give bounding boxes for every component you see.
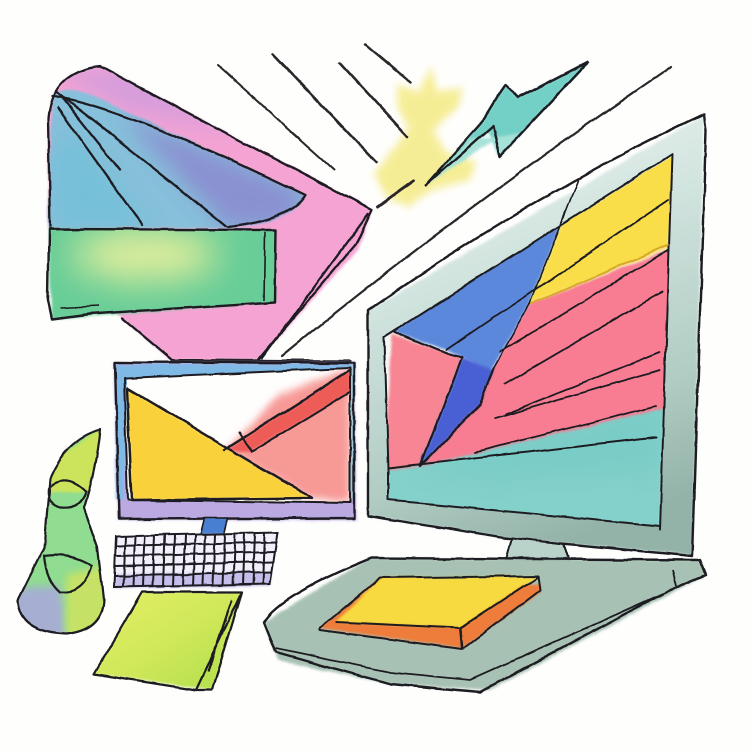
panel: large monitor (368, 114, 706, 556)
rays (218, 44, 672, 356)
small monitor stand (200, 518, 228, 534)
icon: yellow and orange pad (320, 576, 540, 649)
monitor top white screen area (384, 156, 672, 526)
icon: teal lightning bolt (425, 62, 588, 186)
ink outline of folder (48, 66, 372, 361)
screen teal band (384, 400, 664, 530)
icon: lime notebook (94, 592, 242, 690)
panel: green label box (48, 228, 276, 319)
panel: base plate (264, 558, 706, 692)
small monitor yellow triangle (127, 388, 310, 500)
screen blue region (394, 226, 561, 370)
icon: keyboard (114, 532, 278, 588)
screen yellow region (530, 146, 676, 304)
small monitor pink area (226, 368, 350, 503)
panel: pink and blue folder shape (48, 66, 372, 361)
ink lines on monitor (368, 114, 706, 556)
icon: yellow burst splash (374, 66, 476, 208)
icon: mouse figure (16, 428, 106, 635)
screen pink region (422, 248, 672, 466)
monitor stand (506, 538, 570, 562)
panel: small monitor (114, 362, 356, 520)
